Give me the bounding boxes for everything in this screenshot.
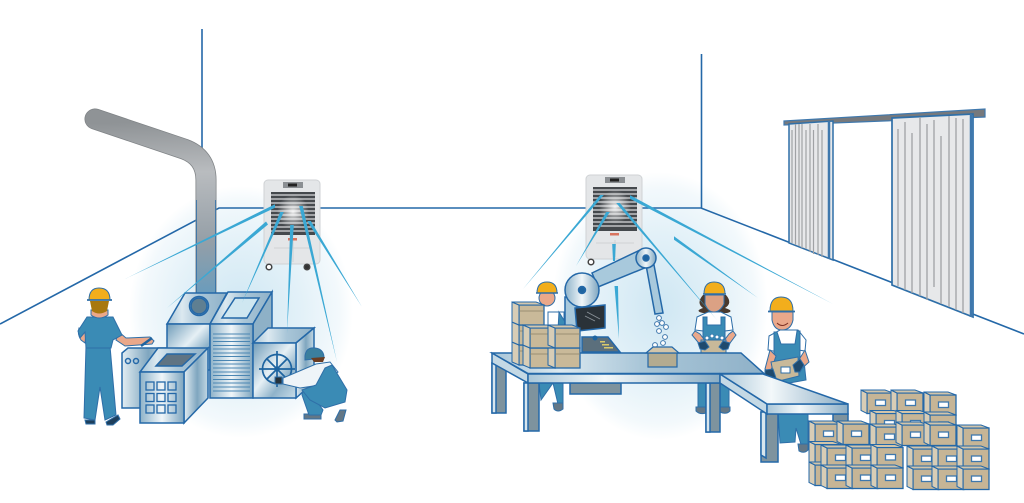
air flow rays: left cooler [125, 204, 362, 362]
worker: behind left table [536, 282, 565, 411]
keypad buttons [146, 382, 176, 413]
stacked cartons: front right [809, 390, 989, 490]
exhaust pipe [95, 119, 216, 293]
air flow rays: right cooler [523, 195, 833, 339]
door with strip curtains [784, 109, 985, 317]
air cooler: left [264, 180, 320, 270]
machine: chimney box [167, 293, 227, 370]
valve wheel [259, 351, 295, 387]
worker: operator at machine [78, 288, 154, 425]
worker: packing at table centre [692, 282, 736, 414]
worker: holding box at side table [765, 297, 809, 452]
glow: right cooling zone [552, 172, 768, 440]
machine: keypad box, front [140, 348, 208, 423]
machine: louvered box [210, 292, 272, 398]
table: side conveyor table [720, 374, 848, 462]
table: main workbench [492, 353, 764, 432]
robot arm [565, 248, 663, 352]
worker: crouching technician [275, 348, 347, 422]
glow: left cooling zone [129, 186, 353, 438]
open box with falling parts [646, 316, 679, 367]
door rail [784, 109, 985, 125]
stacked boxes beside robot [512, 302, 580, 368]
right strip curtain [892, 114, 973, 317]
room walls and floor lines [0, 29, 1024, 334]
robot keyboard [582, 337, 620, 352]
machine: control box, back [122, 348, 170, 408]
robot control screen [575, 305, 605, 331]
machine: valve wheel box [253, 328, 314, 398]
left strip curtain [789, 121, 833, 260]
air cooler: right [586, 175, 642, 265]
